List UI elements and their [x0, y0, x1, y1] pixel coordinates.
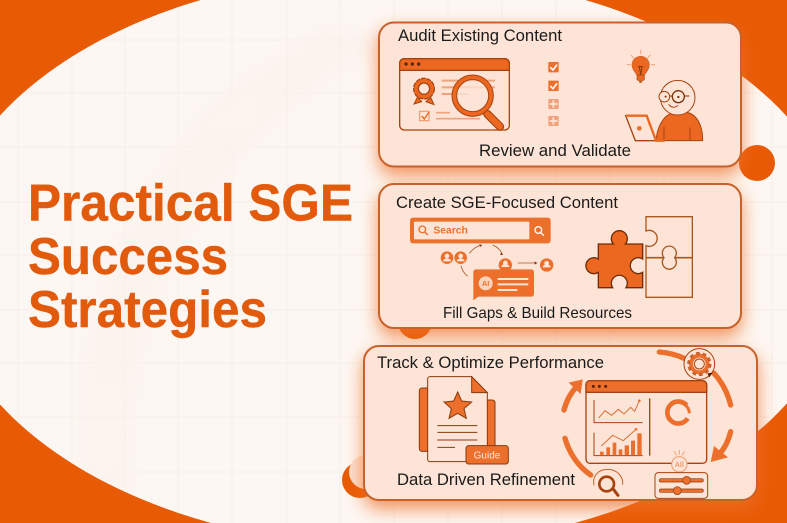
icon: person with laptop: [626, 80, 703, 141]
icon: magnifier badge: [594, 469, 623, 495]
panel three card: [364, 346, 757, 500]
decorative crescent: left of panel three: [342, 455, 383, 498]
panel one card: [379, 22, 741, 166]
panel one caption: Review and Validate: [479, 142, 631, 160]
title: Success: [28, 228, 228, 286]
icon: AI chat bubble: [473, 269, 534, 300]
icon: analytics dashboard: [586, 381, 707, 463]
panel: track and optimize performance: [364, 346, 757, 500]
panel: create SGE-focused content: [379, 184, 741, 328]
icon: cycle arrows: [564, 352, 731, 475]
panel two illustrations: [410, 217, 692, 300]
icon: guide document: Guide: [474, 451, 501, 462]
panel two card: [379, 184, 741, 328]
icon: gear badge: [684, 349, 715, 379]
icon: search bar: Search: [433, 226, 468, 237]
title: Practical SGE: [28, 174, 353, 232]
panel: audit existing content: [379, 22, 741, 166]
panel one heading: Audit Existing Content: [398, 27, 562, 45]
icon: light bulb: [627, 50, 655, 83]
title: Strategies: [28, 281, 267, 339]
icon: orange puzzle piece: [586, 231, 643, 288]
icon: All badge and sliders: [655, 450, 708, 498]
panel three caption: Data Driven Refinement: [397, 471, 575, 489]
icon: All badge and sliders: All: [675, 462, 684, 469]
icon: checklist: [548, 62, 559, 126]
panel one illustrations: [400, 50, 703, 141]
title: [28, 174, 353, 339]
icon: outlined puzzle pieces: [646, 217, 692, 297]
decorative circle: right of panel one: [739, 145, 775, 181]
icon: AI chat bubble: AI: [482, 279, 489, 288]
icon: search bar: [410, 218, 551, 243]
panel two caption: Fill Gaps & Build Resources: [443, 305, 632, 322]
panel three heading: Track & Optimize Performance: [377, 354, 604, 372]
icon: browser audit window: [400, 59, 509, 130]
icon: guide document: [419, 377, 508, 464]
icon: users and flow arrows: [441, 244, 553, 276]
decorative circle: below panel two: [398, 305, 432, 339]
panel three illustrations: [419, 349, 731, 498]
icon: cycle arrow heads: [569, 379, 728, 462]
panel two heading: Create SGE-Focused Content: [396, 194, 618, 212]
